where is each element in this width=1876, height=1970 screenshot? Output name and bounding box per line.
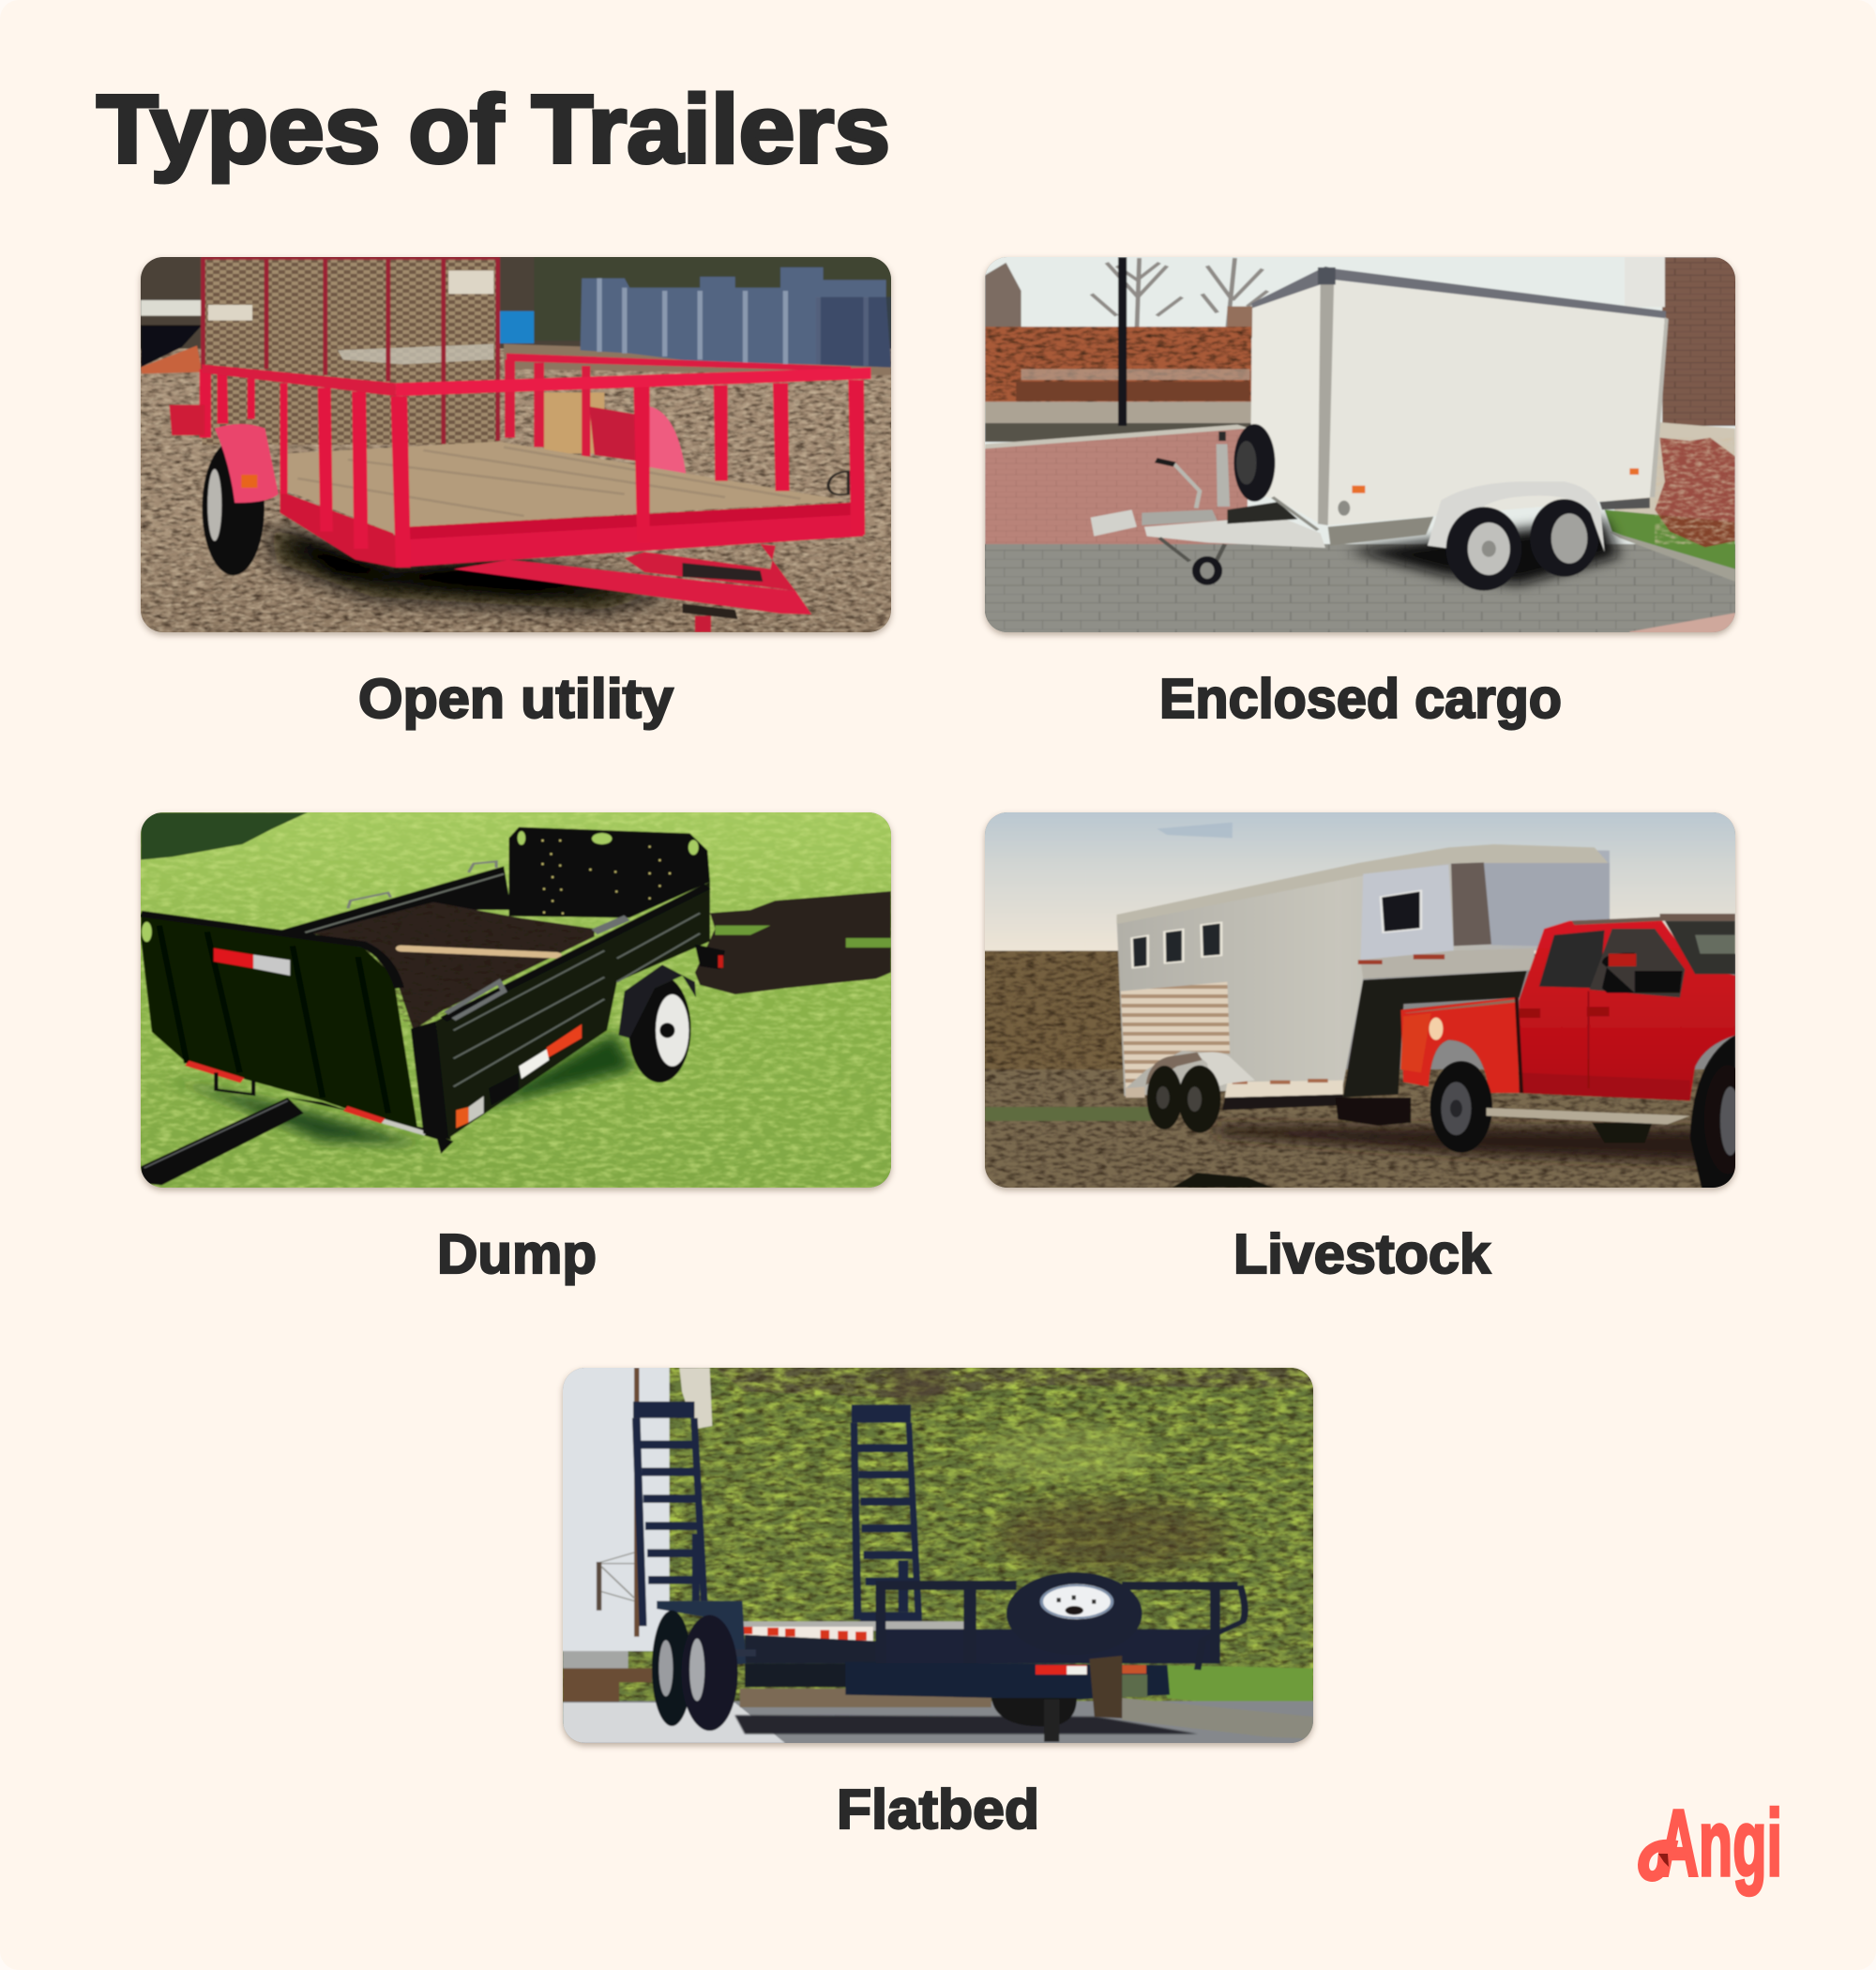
photo: red open utility trailer [141, 257, 891, 632]
label: livestock: Livestock [1233, 1223, 1490, 1285]
panel: dump trailer [137, 811, 895, 1286]
ramps [632, 1402, 922, 1626]
trailer body [1091, 266, 1669, 591]
photo: black dump trailer on grass [141, 812, 891, 1188]
tow bar and jockey wheel [1144, 516, 1325, 548]
panel: livestock trailer [981, 811, 1739, 1285]
panel: open utility trailer [137, 255, 895, 731]
panel: enclosed cargo trailer [981, 255, 1739, 731]
label: dump: Dump [437, 1223, 597, 1285]
horse trailer [1116, 844, 1610, 1133]
label: flatbed: Flatbed [837, 1779, 1039, 1841]
dump trailer [141, 827, 725, 1185]
photo: white enclosed cargo trailer [985, 257, 1735, 632]
soil pile [695, 891, 891, 994]
title: Types of Trailers [97, 75, 890, 183]
grass curb and road [1157, 1665, 1313, 1714]
logo: Angi [1638, 1791, 1782, 1897]
flatbed chassis [652, 1572, 1245, 1742]
wheels and fender [1530, 499, 1598, 577]
panel: flatbed trailer [559, 1366, 1317, 1841]
logo: Angi: Angi [1658, 1791, 1782, 1896]
photo: dark flatbed trailer with ramps [563, 1368, 1313, 1743]
label: enclosed cargo: Enclosed cargo [1159, 668, 1562, 730]
label: open utility: Open utility [358, 668, 673, 730]
photo: silver livestock trailer and red pickup [985, 812, 1735, 1188]
wheel [202, 441, 265, 575]
red pickup truck [1400, 914, 1752, 1204]
trailer frame [170, 354, 871, 632]
bush [141, 812, 308, 860]
